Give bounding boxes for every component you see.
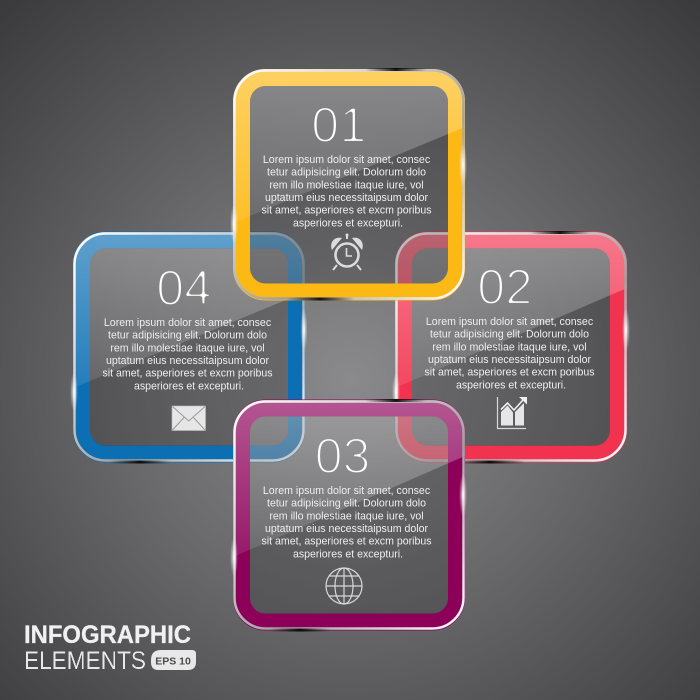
icon: alarm clock xyxy=(331,234,363,270)
title: infographic: INFOGRAPHIC xyxy=(24,621,191,649)
body text 04: rem illo molestiae itaque iure, vol xyxy=(110,342,265,354)
gloss 01 xyxy=(233,69,465,223)
silver border 03 xyxy=(234,402,464,628)
colour frame 04 xyxy=(82,240,296,454)
body text 01: tetur adipisicing elit. Dolorum dolo xyxy=(267,167,426,179)
panel: 02 chart xyxy=(392,231,630,464)
gloss 04 xyxy=(73,232,305,388)
title block xyxy=(24,621,196,675)
body text 02: sit amet, asperiores et excm poribus xyxy=(424,367,595,379)
gloss 02 xyxy=(395,232,627,388)
body text 02: rem illo molestiae itaque iure, vol xyxy=(432,341,587,353)
number 01: 01 xyxy=(311,97,367,153)
body text 03: Lorem ipsum dolor sit amet, consec xyxy=(263,485,431,497)
body text 02: asperiores et excepturi. xyxy=(456,379,566,391)
body text 04: Lorem ipsum dolor sit amet, consec xyxy=(104,317,272,329)
icon: growth chart xyxy=(498,397,527,428)
panel: 01 alarm clock xyxy=(230,68,467,300)
body text 03: rem illo molestiae itaque iure, vol xyxy=(269,510,424,522)
badge: eps 10: EPS 10 xyxy=(155,656,191,668)
body text 01: Lorem ipsum dolor sit amet, consec xyxy=(263,154,431,166)
border glints 01 xyxy=(230,68,467,300)
body text 04: uptatum eius necessitaipsum dolor xyxy=(106,355,270,367)
badge: eps 10 xyxy=(151,650,196,670)
body text 03: tetur adipisicing elit. Dolorum dolo xyxy=(267,498,426,510)
body text 03: sit amet, asperiores et excm poribus xyxy=(261,536,432,548)
colour frame 02 xyxy=(404,240,618,454)
border glints 04 xyxy=(70,308,308,464)
body text 02: uptatum eius necessitaipsum dolor xyxy=(428,354,592,366)
body text 02: Lorem ipsum dolor sit amet, consec xyxy=(426,316,594,328)
body text 04: asperiores et excepturi. xyxy=(134,380,244,392)
body text 02: tetur adipisicing elit. Dolorum dolo xyxy=(430,329,589,341)
colour frame 01 xyxy=(242,78,456,292)
border glints 03 xyxy=(230,399,467,632)
body text 01: rem illo molestiae itaque iure, vol xyxy=(269,179,424,191)
silver border 04 xyxy=(74,234,304,460)
body text 01: uptatum eius necessitaipsum dolor xyxy=(265,192,429,204)
silver border 01 xyxy=(234,70,464,298)
window 03 xyxy=(250,416,448,614)
number 02: 02 xyxy=(477,259,533,315)
silver border 02 xyxy=(396,234,626,460)
body text 01: sit amet, asperiores et excm poribus xyxy=(261,205,432,217)
icon: globe xyxy=(326,568,362,604)
gloss 03 xyxy=(233,400,465,557)
body text 01: asperiores et excepturi. xyxy=(293,217,403,229)
number 03: 03 xyxy=(315,428,370,484)
title: elements: ELEMENTS xyxy=(24,647,146,675)
colour frame 03 xyxy=(242,408,456,622)
border glints 02 xyxy=(392,231,630,464)
body text 03: asperiores et excepturi. xyxy=(293,548,403,560)
body text 04: sit amet, asperiores et excm poribus xyxy=(102,368,273,380)
window 01 xyxy=(250,86,448,284)
panel: 04 mail xyxy=(70,232,308,464)
body text 03: uptatum eius necessitaipsum dolor xyxy=(265,523,429,535)
number 04: 04 xyxy=(156,260,212,316)
icon: envelope xyxy=(172,406,206,430)
body text 04: tetur adipisicing elit. Dolorum dolo xyxy=(108,330,267,342)
window 04 xyxy=(90,248,288,446)
panel: 03 globe xyxy=(230,399,467,632)
window 02 xyxy=(412,248,610,446)
